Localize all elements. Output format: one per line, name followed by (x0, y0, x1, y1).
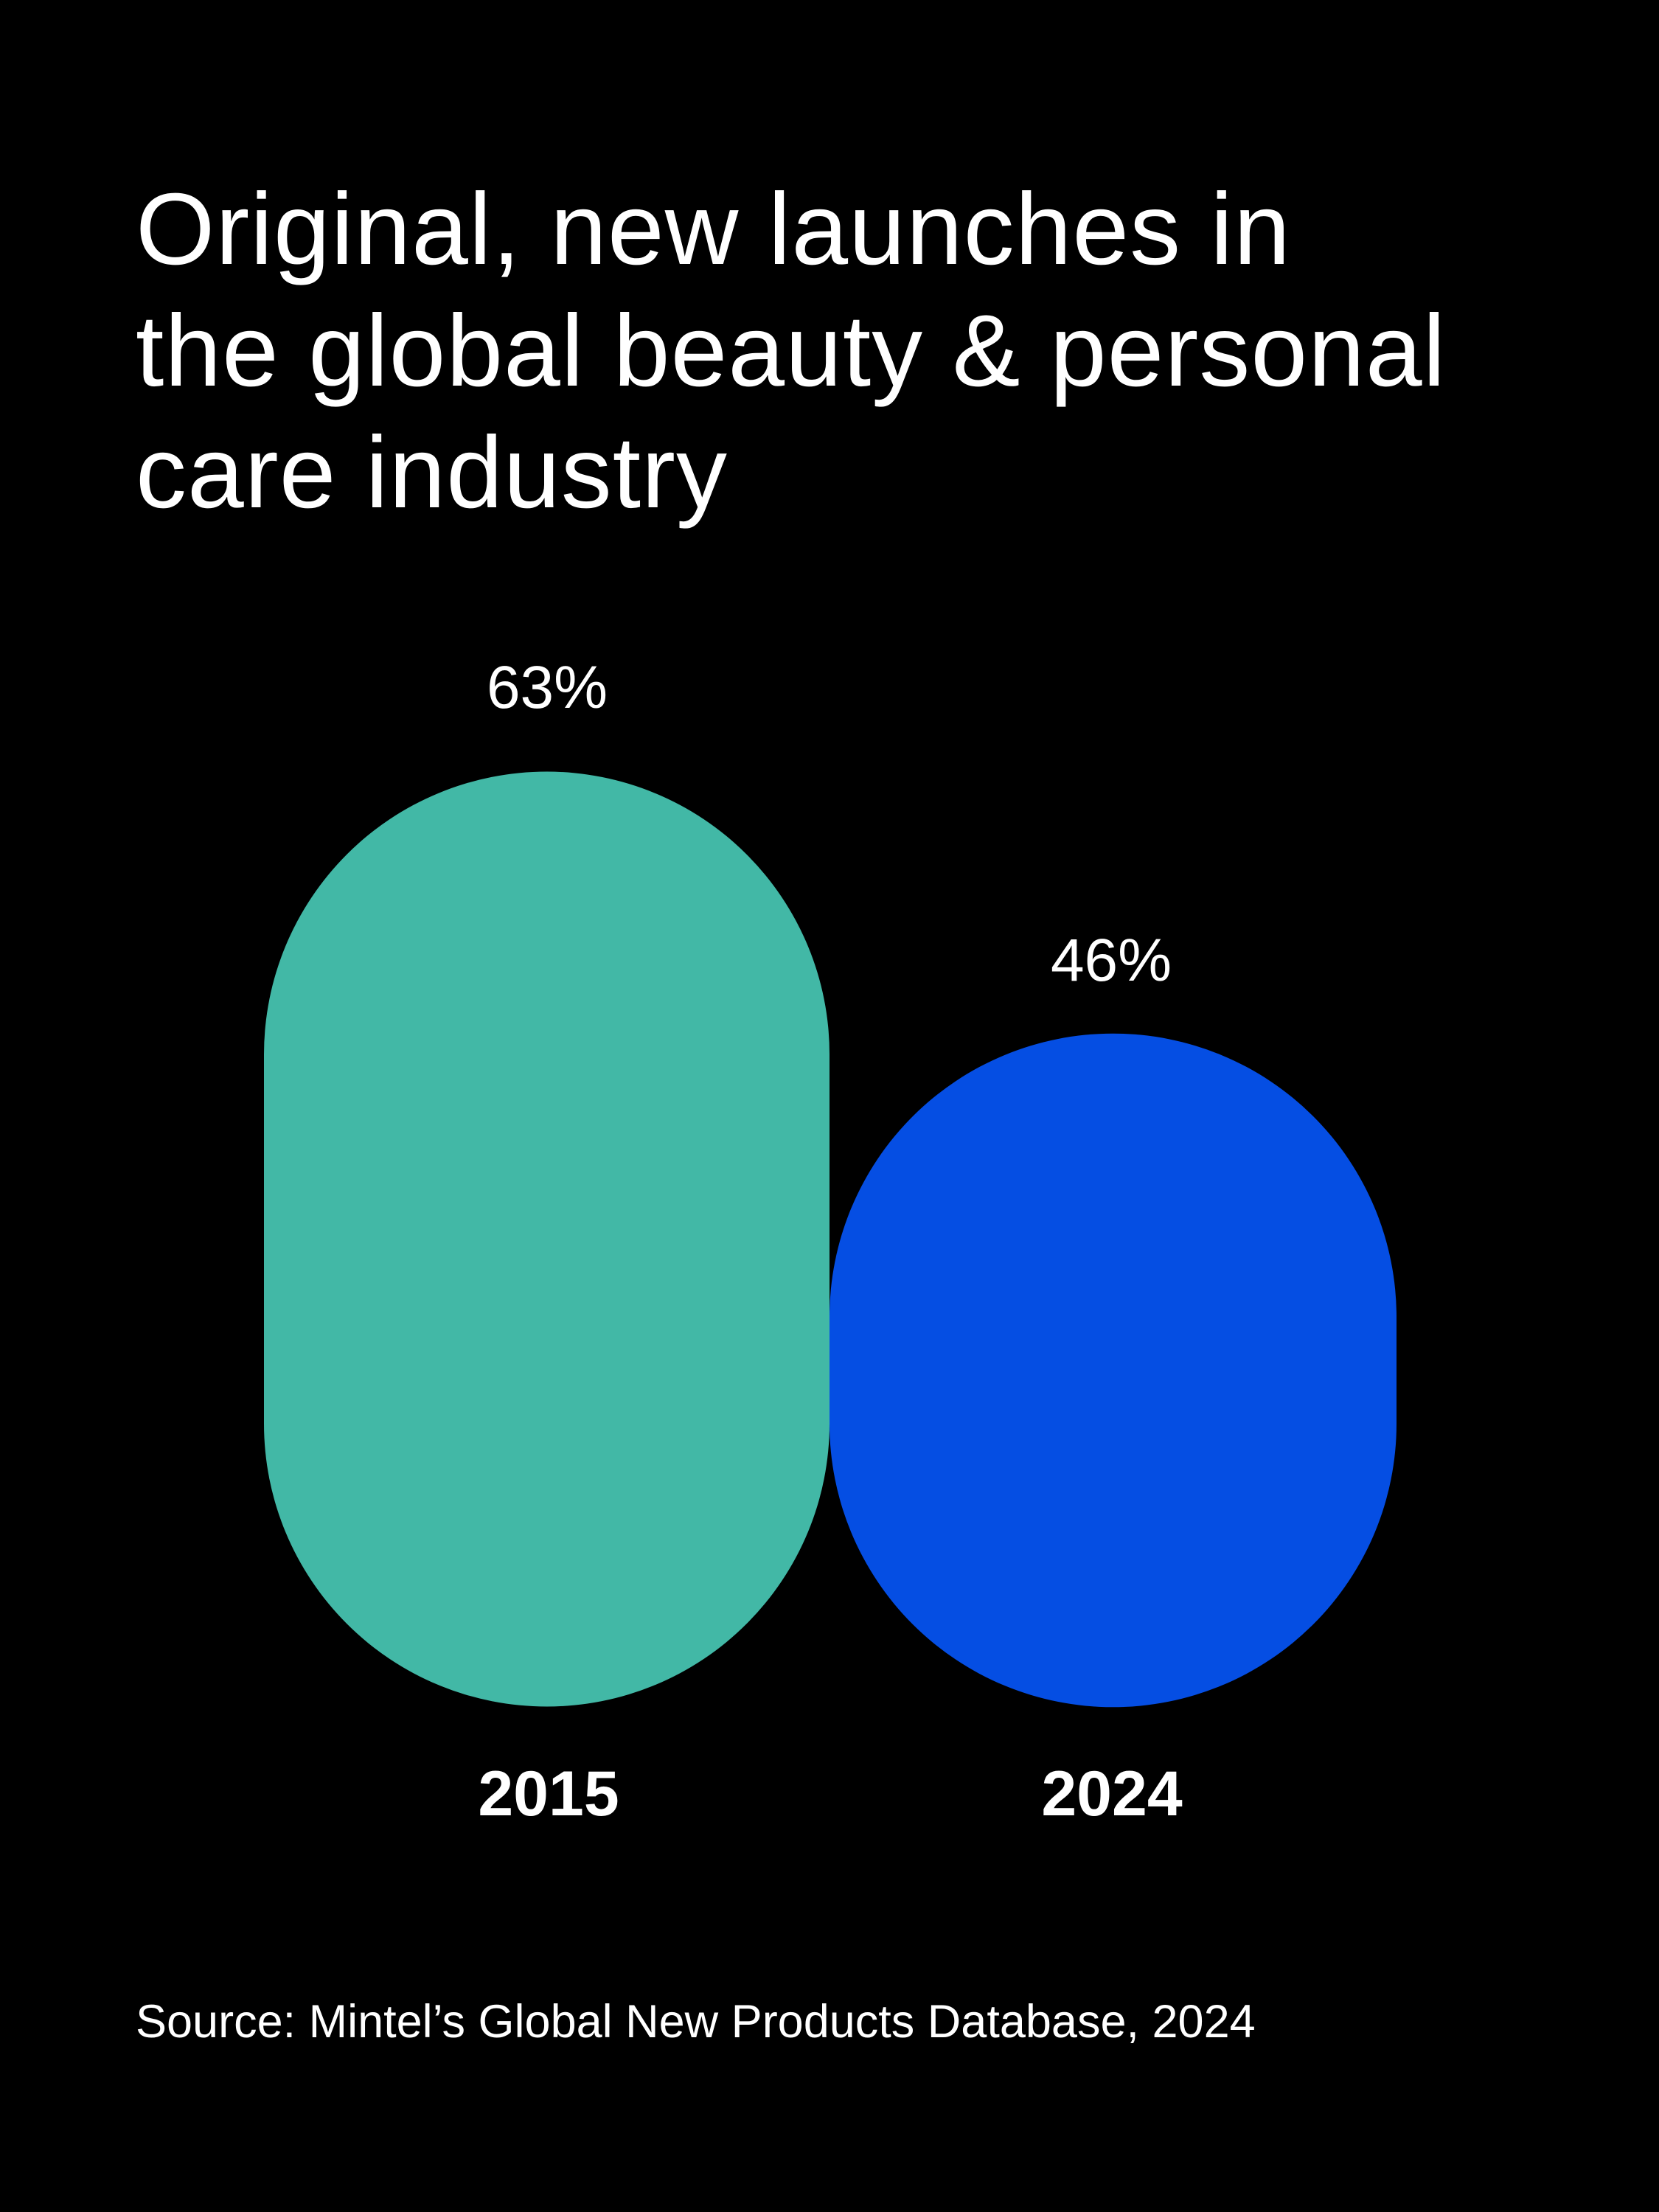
title: the global beauty & personal (136, 294, 1446, 408)
title (136, 173, 1446, 529)
source note: Source: Mintel’s Global New Products Database, 2024 (136, 1996, 1256, 2048)
value label 46%: 46% (1051, 927, 1172, 994)
bar: 2015 green pill (264, 771, 830, 1706)
title: Original, new launches in (136, 173, 1291, 286)
year label 2024: 2024 (1041, 1759, 1183, 1829)
year label 2015: 2015 (478, 1759, 619, 1829)
bar: 2024 blue pill (830, 1034, 1397, 1707)
bar chart (264, 654, 1397, 1829)
title: care industry (136, 416, 728, 529)
value label 63%: 63% (487, 654, 608, 721)
